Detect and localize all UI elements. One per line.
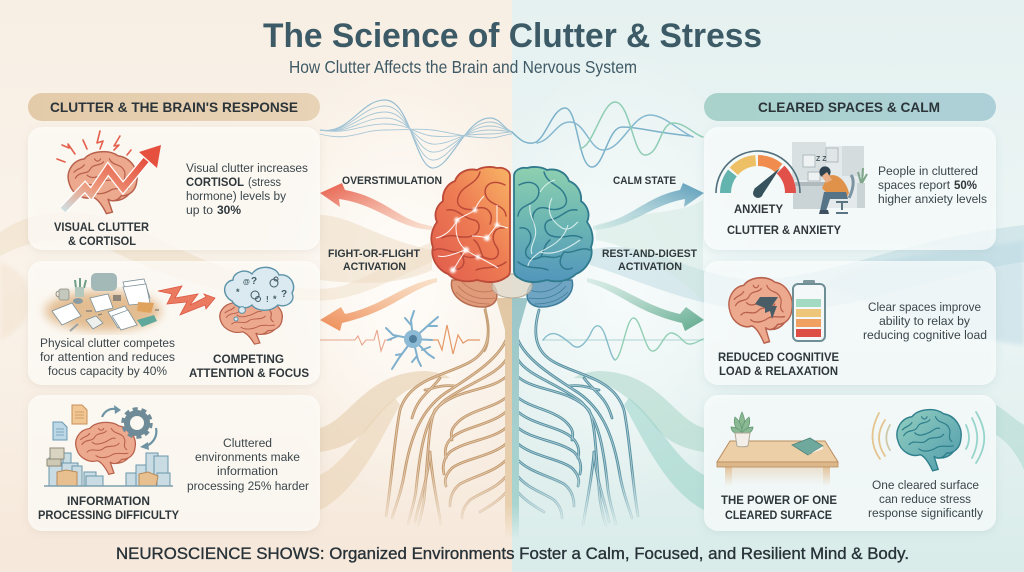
- panel: power of one cleared surface: [704, 395, 996, 531]
- text: competing attention label: ATTENTION & FOCUS: [189, 366, 309, 380]
- text: physical clutter stat: focus capacity by 40%: [48, 364, 167, 378]
- text: cortisol stat: [186, 161, 308, 217]
- icon: lightning arrow: [158, 286, 215, 315]
- text: physical clutter stat: Physical clutter competes: [40, 336, 175, 350]
- text: physical clutter stat: for attention and reduces: [40, 350, 175, 364]
- icon: calm brain with soft waves: [872, 410, 984, 471]
- text: information processing stat: environments make: [195, 450, 300, 464]
- icon: brain with thought cloud: [220, 267, 294, 344]
- left nerve from brain: [484, 305, 489, 352]
- text: relaxation stat: [863, 300, 987, 342]
- text: information processing label: INFORMATION: [67, 494, 150, 508]
- text: information processing stat: Cluttered: [223, 436, 272, 450]
- arrow: calm state: [593, 183, 704, 230]
- icon: stressed person in cluttered office: Z Z: [816, 156, 827, 163]
- label: fight-or-flight activation: [328, 248, 420, 273]
- text: anxiety stat: [878, 164, 987, 206]
- icon: brain with thought cloud: !: [266, 295, 269, 304]
- text: cortisol stat: (stress: [248, 175, 281, 189]
- background: warm left half: [0, 0, 512, 572]
- wave: calm signal: [543, 318, 703, 360]
- label: fight-or-flight activation: FIGHT-OR-FLIGHT: [328, 248, 420, 260]
- text: cortisol stat: CORTISOL: [186, 175, 245, 189]
- icon: neuron with ECG signal: [320, 311, 480, 369]
- text: cortisol stat: Visual clutter increases: [186, 161, 308, 175]
- label: rest-and-digest activation: ACTIVATION: [618, 261, 682, 273]
- cerebellum left: [451, 280, 497, 307]
- text: clutter and anxiety label: CLUTTER & ANXIETY: [727, 223, 841, 237]
- panel: visual clutter and cortisol: [28, 127, 320, 250]
- text: anxiety stat: 50%: [954, 178, 977, 192]
- icon: brain with thought cloud: *: [236, 287, 240, 297]
- text: anxiety stat: higher anxiety levels: [878, 192, 987, 206]
- text: visual clutter label: [54, 220, 149, 248]
- text: visual clutter label: VISUAL CLUTTER: [54, 220, 149, 234]
- top-right calm wave: [512, 102, 703, 167]
- brain stem connector: [492, 274, 532, 298]
- icon: brain, gear and paperwork: [44, 405, 173, 486]
- right centre glow: [484, 50, 764, 510]
- text: cleared surface stat: can reduce stress: [879, 492, 971, 506]
- arrow: overstimulation: [320, 183, 432, 230]
- text: cleared surface stat: response significantly: [868, 506, 984, 520]
- panel: information processing difficulty: [28, 395, 320, 531]
- text: visual clutter label: & CORTISOL: [68, 234, 136, 248]
- text: relaxation stat: ability to relax by: [879, 314, 971, 328]
- panel: cleared spaces & calm column: [704, 93, 996, 531]
- label: rest-and-digest activation: [602, 248, 697, 273]
- nervous system: left branches: [386, 310, 508, 526]
- label: calm state: CALM STATE: [613, 175, 676, 187]
- text: cleared surface stat: One cleared surface: [872, 478, 979, 492]
- text: competing attention label: COMPETING: [213, 352, 284, 366]
- cerebellum right: [527, 280, 573, 307]
- text: cortisol stat: hormone) levels by: [186, 189, 287, 203]
- background: cool right half: [512, 0, 1024, 572]
- central brain: stressed left hemisphere: [431, 167, 510, 282]
- footer message: NEUROSCIENCE SHOWS: Organized Environments Foster a Calm, Focused, and Resilient Mind & Body.: [116, 544, 909, 563]
- arrow: rest-and-digest: [587, 278, 704, 331]
- central brain: calm right hemisphere: [514, 167, 593, 282]
- text: anxiety stat: spaces report: [878, 178, 951, 192]
- panel: reduced cognitive load: [704, 261, 996, 385]
- text: power of one label: [721, 493, 837, 522]
- left centre glow: [260, 50, 540, 510]
- icon: brain with dark lightning: [729, 278, 792, 343]
- text: information processing stat: information: [217, 464, 278, 478]
- text: information processing label: [38, 494, 179, 522]
- title: The Science of Clutter & Stress: [263, 17, 762, 55]
- heading pill: cleared spaces: [704, 93, 996, 121]
- text: information processing stat: [187, 436, 309, 493]
- icon: brain with thought cloud: *: [273, 294, 277, 304]
- text: power of one label: CLEARED SURFACE: [725, 508, 832, 522]
- text: physical clutter stat: [40, 336, 175, 378]
- text: competing attention label: [189, 352, 309, 380]
- text: power of one label: THE POWER OF ONE: [721, 493, 837, 507]
- text: relaxation stat: Clear spaces improve: [868, 300, 981, 314]
- text: information processing label: PROCESSING DIFFICULTY: [38, 508, 179, 522]
- panel: clutter and anxiety: [704, 127, 996, 250]
- text: cleared surface stat: [868, 478, 984, 520]
- icon: brain with thought cloud: ?: [281, 289, 287, 300]
- label: rest-and-digest activation: REST-AND-DIGEST: [602, 248, 697, 260]
- heading pill: clutter and brain: CLUTTER & THE BRAIN'S RESPONSE: [50, 100, 298, 115]
- nervous system: right branches: [516, 310, 638, 526]
- panel: clutter & the brain's response column: [28, 93, 320, 531]
- text: reduced cognitive load label: REDUCED COGNITIVE: [718, 350, 839, 364]
- icon: brain with thought cloud: @: [243, 279, 250, 286]
- panel: competing attention and focus: [28, 261, 320, 385]
- icon: brain with thought cloud: ?: [251, 276, 257, 287]
- arrow: fight-or-flight: [320, 278, 437, 331]
- subtitle: How Clutter Affects the Brain and Nervous System: [289, 57, 637, 77]
- label: fight-or-flight activation: ACTIVATION: [343, 261, 406, 273]
- text: anxiety stat: People in cluttered: [878, 164, 978, 178]
- label: overstimulation: OVERSTIMULATION: [342, 175, 442, 187]
- top-left stress wave: [320, 100, 512, 168]
- icon: cluttered desk: [45, 273, 161, 331]
- icon: anxiety gauge: [716, 151, 800, 198]
- text: relaxation stat: reducing cognitive load: [863, 328, 987, 342]
- background waves: warm: [0, 212, 450, 510]
- text: information processing stat: processing 25% harder: [187, 479, 309, 493]
- text: reduced cognitive load label: [718, 350, 839, 378]
- text: cortisol stat: 30%: [217, 203, 241, 217]
- background waves: cool: [574, 200, 1024, 510]
- icon: battery: [793, 280, 825, 341]
- heading pill: clutter and brain: [28, 93, 320, 121]
- heading pill: cleared spaces: CLEARED SPACES & CALM: [758, 100, 940, 115]
- text: cortisol stat: up to: [186, 203, 213, 217]
- text: reduced cognitive load label: LOAD & RELAXATION: [719, 364, 838, 378]
- icon: brain with rising arrow: [57, 131, 161, 214]
- text: gauge label: ANXIETY: [734, 202, 783, 216]
- icon: clear desk with plant and book: [717, 412, 838, 486]
- icon: stressed person in cluttered office: [792, 142, 867, 214]
- spinal cord: [496, 298, 528, 540]
